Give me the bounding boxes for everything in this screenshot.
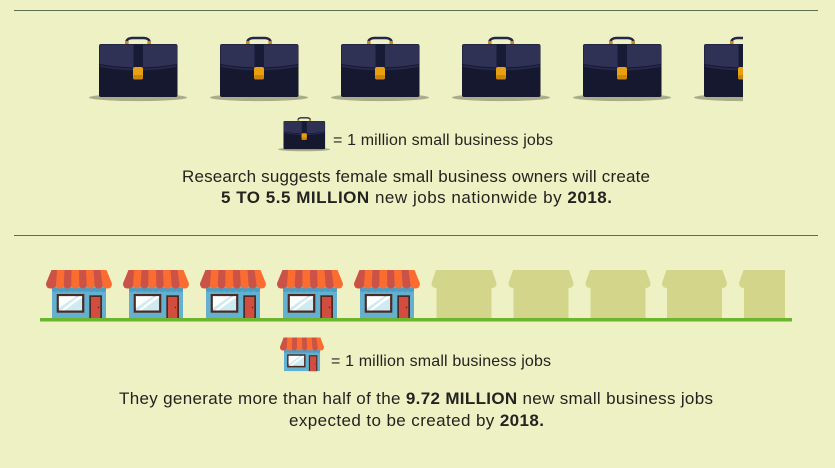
icon: ghost store 7 xyxy=(508,270,574,318)
icon: ghost store 6 xyxy=(432,270,496,318)
icon: briefcase 1 xyxy=(89,38,187,101)
briefcase legend xyxy=(278,118,553,151)
text: share of new jobs statement: expected to be created by 2018. xyxy=(289,411,544,430)
icon: store 1 xyxy=(46,270,112,318)
icon: partial ghost store xyxy=(739,270,785,318)
ground line xyxy=(40,318,792,322)
icon: briefcase 3 xyxy=(331,38,429,101)
icon: partial briefcase xyxy=(694,36,743,102)
icon: store 5 xyxy=(354,270,420,318)
storefront pictogram row xyxy=(40,270,804,322)
text: jobs research statement xyxy=(182,167,650,207)
icon: store 4 xyxy=(277,270,343,318)
text: jobs research statement: 5 TO 5.5 MILLION new jobs nationwide by 2018. xyxy=(221,188,612,207)
icon: ghost store 8 xyxy=(586,270,650,318)
icon: ghost store 9 xyxy=(662,270,727,318)
briefcase pictogram row xyxy=(89,38,792,101)
text: jobs research statement: Research suggests female small business owners will create xyxy=(182,167,650,186)
icon: briefcase 4 xyxy=(452,38,550,101)
icon: briefcase 2 xyxy=(210,38,308,101)
text: share of new jobs statement: They generate more than half of the 9.72 MILLION new small business jobs xyxy=(119,389,713,408)
storefront legend xyxy=(280,338,551,371)
legend text: = 1 million small business jobs xyxy=(331,353,551,370)
icon: store 2 xyxy=(123,270,189,318)
text: share of new jobs statement xyxy=(119,389,713,430)
legend text: = 1 million small business jobs xyxy=(333,132,553,149)
icon: briefcase 5 xyxy=(573,38,671,101)
icon: legend briefcase xyxy=(278,118,330,151)
icon: store 3 xyxy=(200,270,266,318)
icon: legend store xyxy=(280,338,324,371)
